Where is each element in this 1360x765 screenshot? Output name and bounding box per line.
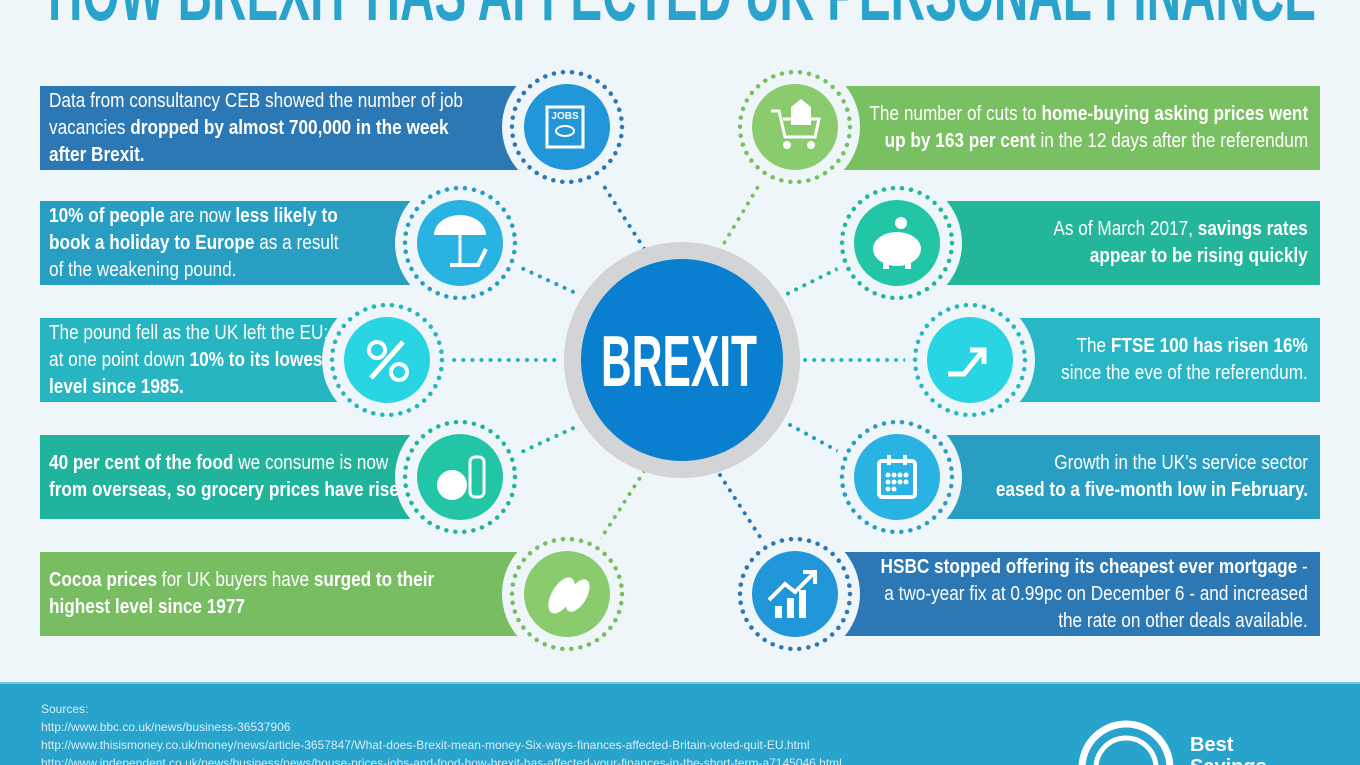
panel: jobs: after Brexit. [49, 144, 145, 166]
panel: mortgage [780, 552, 1320, 636]
panel: cocoa: Cocoa prices for UK buyers have surged to their [49, 569, 434, 591]
panel: jobs [40, 86, 580, 170]
panel: home prices: The number of cuts to home-buying asking prices went [869, 103, 1308, 125]
panel: cocoa [40, 552, 580, 636]
footer: sources: Sources: [41, 702, 88, 716]
panel: pound: level since 1985. [49, 376, 184, 398]
panel: mortgage: HSBC stopped offering its cheapest ever mortgage - [881, 556, 1308, 578]
panel: mortgage: the rate on other deals available. [1058, 610, 1308, 632]
panel: mortgage: a two-year fix at 0.99pc on December 6 - and increased [884, 582, 1308, 604]
panel: home prices [780, 86, 1320, 170]
center: BREXIT: BREXIT [601, 322, 757, 402]
icon: jobs [502, 62, 632, 192]
panel: services: Growth in the UK's service sector [1054, 452, 1308, 474]
footer: sources: http://www.thisismoney.co.uk/money/news/article-3657847/What-does-Brexit-mean-money-Six-ways-finances-affected-Britain-voted-quit-EU.html [41, 738, 810, 752]
panel: pound: at one point down 10% to its lowest [49, 348, 328, 370]
panel: cocoa: highest level since 1977 [49, 596, 245, 618]
panel: holiday [40, 201, 470, 285]
panel: services [890, 435, 1320, 519]
icon: holiday umbrella [395, 178, 525, 308]
panel: holiday: 10% of people are now less likely to [49, 204, 338, 226]
panel: savings: As of March 2017, savings rates [1054, 218, 1308, 240]
connectors [445, 180, 912, 540]
panel: pound: The pound fell as the UK left the EU; [49, 322, 328, 344]
center: BREXIT [564, 242, 800, 478]
icon: calendar [832, 412, 962, 542]
panel: FTSE: since the eve of the referendum. [1061, 362, 1308, 384]
icon: home cart [730, 62, 860, 192]
panel: food: from overseas, so grocery prices have risen. [49, 479, 414, 501]
icon: piggy bank [832, 178, 962, 308]
panel: savings: appear to be rising quickly [1090, 245, 1308, 267]
panel: jobs: Data from consultancy CEB showed the number of job [49, 90, 463, 112]
icon: rising arrow [905, 295, 1035, 425]
panel: food: 40 per cent of the food we consume is now [49, 452, 388, 474]
panel: FTSE [970, 318, 1320, 402]
panel: pound [40, 318, 390, 402]
panel: FTSE: The FTSE 100 has risen 16% [1077, 335, 1308, 357]
panel: services: eased to a five-month low in February. [996, 479, 1308, 501]
logo: Best Savings [1078, 720, 1267, 765]
icon: percent [322, 295, 452, 425]
panel: holiday: book a holiday to Europe as a result [49, 232, 339, 254]
panel: savings [890, 201, 1320, 285]
icon: food [395, 412, 525, 542]
panel: jobs: vacancies dropped by almost 700,000 in the week [49, 116, 449, 138]
panel: holiday: of the weakening pound. [49, 258, 236, 280]
icon: cocoa [502, 529, 632, 659]
footer: sources [0, 682, 1360, 765]
panel: food [40, 435, 470, 519]
footer: sources: http://www.bbc.co.uk/news/business-36537906 [41, 720, 290, 734]
icon: jobs: JOBS [551, 111, 579, 122]
logo: Best Savings: Best [1190, 734, 1233, 756]
panel: home prices: up by 163 per cent in the 12 days after the referendum [884, 130, 1308, 152]
icon: chart [730, 529, 860, 659]
